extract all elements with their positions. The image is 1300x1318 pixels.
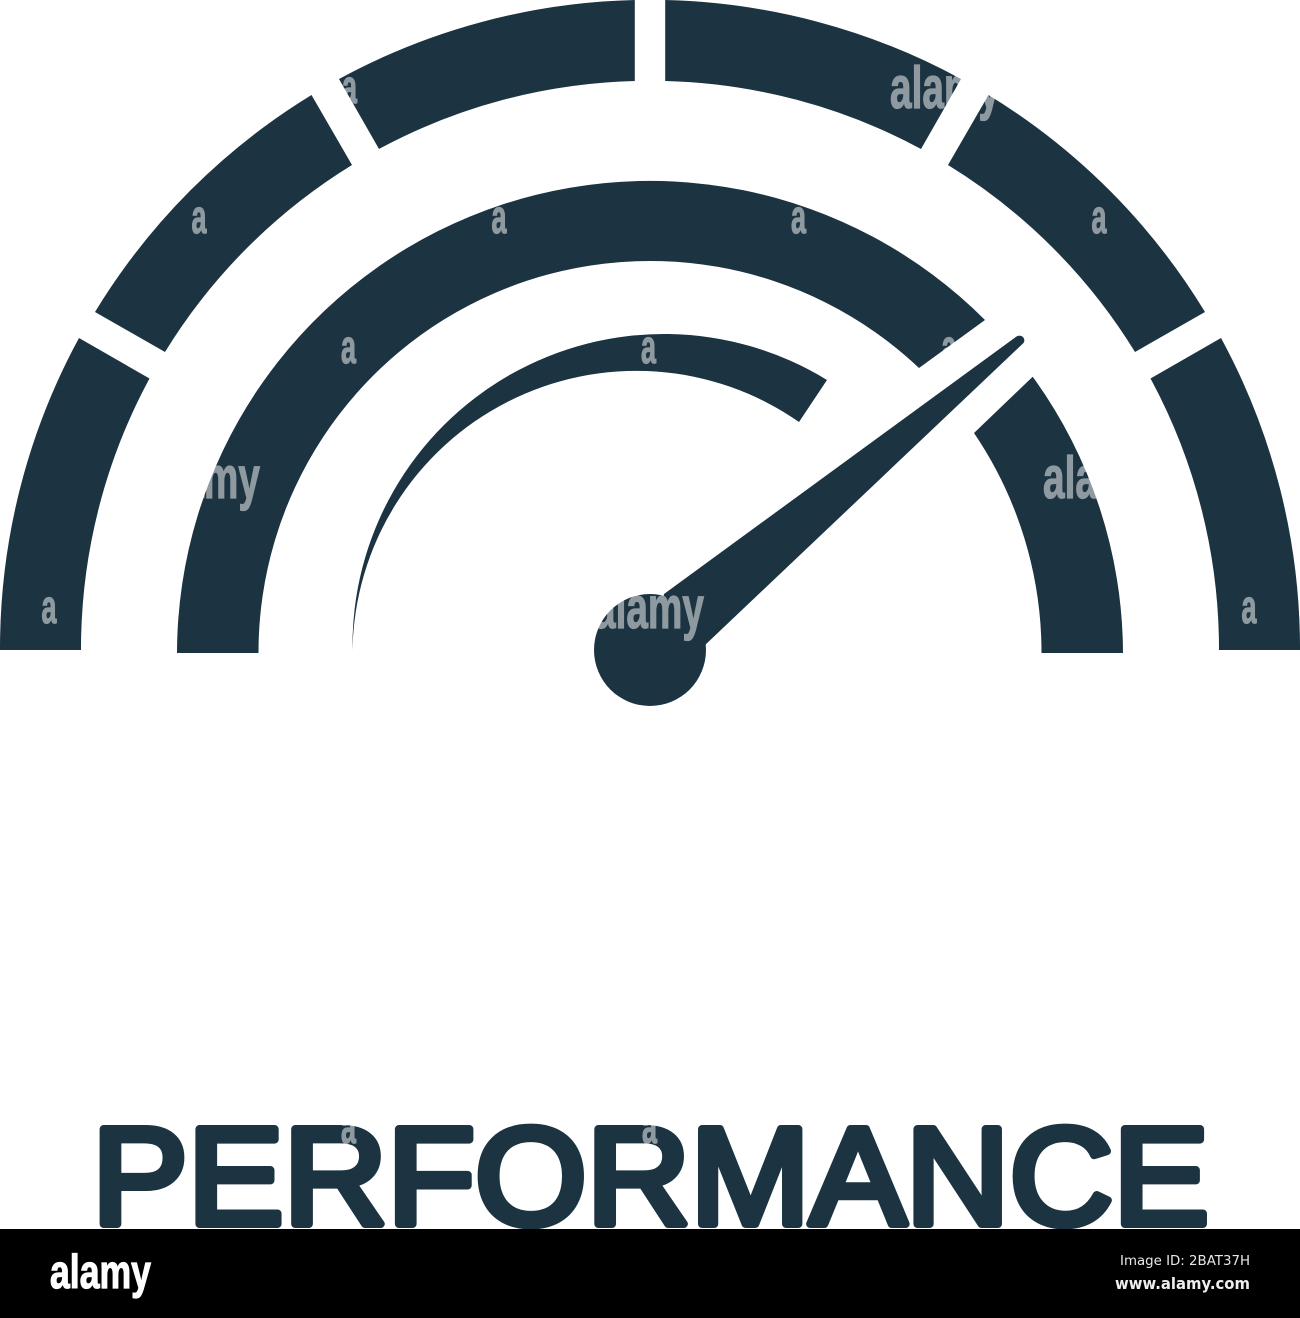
image id: Image ID: 2BAT37H (1120, 1254, 1250, 1269)
watermark word right: alamy (1043, 445, 1153, 511)
watermark letters: a (942, 320, 957, 373)
middle ring short arc (974, 377, 1123, 653)
title: PERFORMANCE: PERFORMANCE (92, 1100, 1209, 1254)
footer logo: alamy (50, 1245, 151, 1298)
footer bar (0, 1229, 1300, 1318)
needle (650, 336, 1024, 700)
watermarks over the icon (42, 55, 1257, 1153)
watermark letters: a (642, 1100, 657, 1153)
outer ring segment 3 (339, 0, 635, 149)
watermark letters: a (342, 60, 357, 113)
outer ring segment 2 (95, 95, 352, 352)
watermark letters: a (341, 320, 356, 373)
icon: speedometer gauge (0, 0, 1300, 706)
outer ring segment 4 (665, 0, 961, 149)
outer ring segment 1 (0, 338, 149, 650)
website: www.alamy.com (1115, 1274, 1250, 1293)
inner tapered arc (352, 334, 827, 650)
watermark letters: a (791, 190, 806, 243)
watermark letters: a (1242, 580, 1257, 633)
outer ring segment 5 (948, 95, 1205, 352)
watermark letters: a (42, 580, 57, 633)
watermark letters: a (192, 190, 207, 243)
watermark letters: a (341, 1100, 356, 1153)
watermark letters (42, 60, 1257, 1153)
watermark word top right: alamy (890, 55, 1000, 121)
middle ring long arc (177, 181, 985, 653)
watermark word centre: alamy (594, 575, 704, 641)
watermark letters: a (1092, 190, 1107, 243)
needle hub (594, 594, 706, 706)
watermark word left: alamy (150, 445, 260, 511)
watermark letters: a (492, 190, 507, 243)
outer ring segment 6 (1150, 338, 1300, 650)
watermark letters: a (641, 320, 656, 373)
